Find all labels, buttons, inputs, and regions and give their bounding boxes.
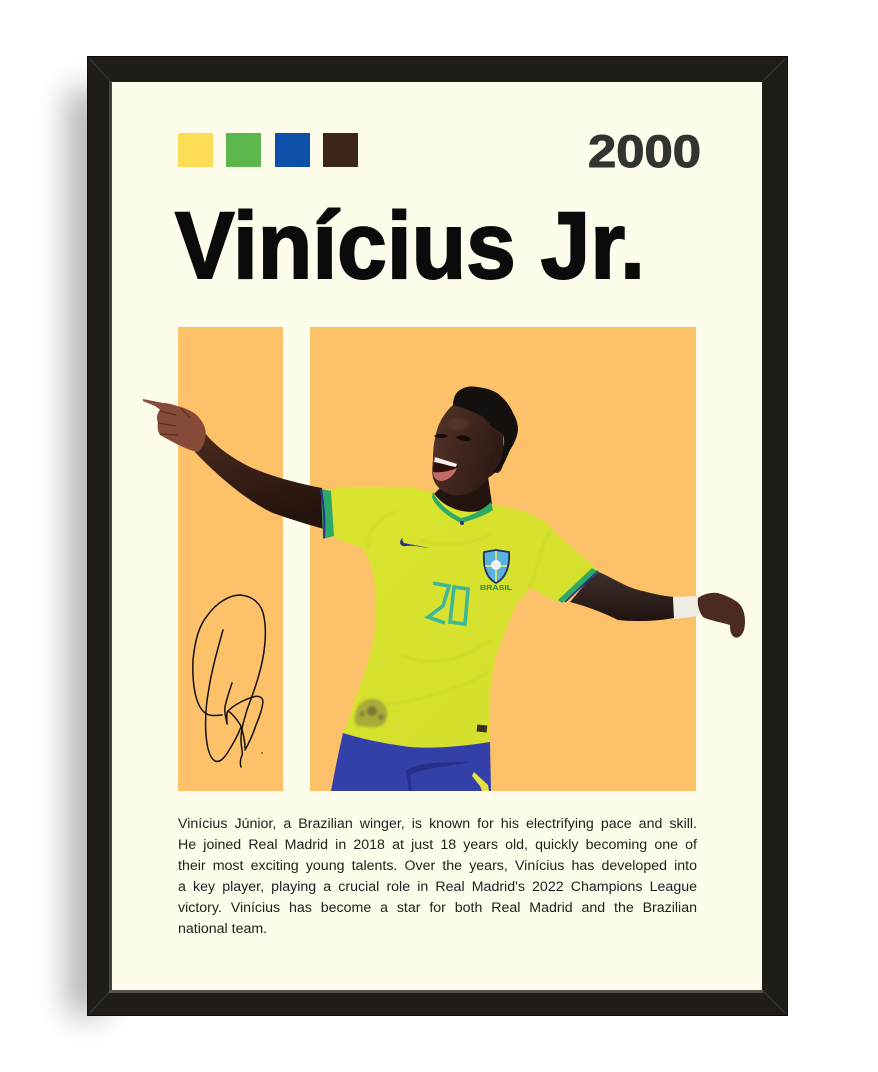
jersey shadow folds [368, 512, 550, 705]
biography paragraph: victory. Vinícius has become a star for both Real Madrid and the Brazilian [178, 900, 697, 916]
biography paragraph: their most exciting young talents. Over the years, Vinícius has developed into [178, 858, 697, 874]
hair [453, 386, 518, 473]
left sleeve cuff piping [321, 489, 324, 538]
jersey tag [477, 724, 487, 733]
swoosh logo [400, 537, 429, 548]
paper background [112, 82, 762, 990]
eyes [434, 434, 472, 441]
left arm [195, 433, 324, 529]
tongue [433, 468, 457, 481]
teeth [434, 457, 457, 467]
crest [480, 550, 513, 592]
neck [434, 470, 492, 521]
colour palette swatches [178, 133, 358, 167]
orange panel: left [178, 327, 283, 791]
left sleeve cuff [321, 489, 334, 539]
collar button [460, 521, 464, 525]
collar [432, 492, 493, 523]
birth year: 2000 [588, 126, 701, 177]
player photo illustration [143, 386, 745, 791]
jersey [330, 487, 597, 748]
shorts stripe [472, 772, 489, 791]
biography paragraph: national team. [178, 921, 267, 937]
right sleeve cuff [558, 568, 599, 603]
left hand fingers [158, 408, 190, 435]
poster frame shadow [68, 90, 104, 1015]
shorts shading [406, 762, 470, 791]
right hand [698, 593, 745, 638]
right arm [570, 571, 674, 621]
shorts [331, 733, 491, 791]
left hand [143, 399, 206, 452]
jersey dirt stain [354, 699, 387, 727]
wristband [673, 596, 699, 619]
poster frame [87, 56, 788, 1016]
biography paragraph: He joined Real Madrid in 2018 at just 18 years old, quickly becoming one of [178, 837, 697, 853]
crest: BRASIL [480, 585, 513, 592]
forehead highlight [447, 418, 469, 430]
biography paragraph: a key player, playing a crucial role in Real Madrid's 2022 Champions League [178, 879, 697, 895]
ear [491, 451, 503, 473]
shirt number [428, 583, 468, 624]
biography paragraph [178, 816, 697, 937]
right sleeve cuff piping [565, 571, 598, 602]
title: Vinícius Jr. [175, 193, 645, 299]
face [432, 405, 504, 495]
orange panel: right [310, 327, 696, 791]
signature [193, 595, 265, 767]
mouth [433, 459, 457, 475]
biography paragraph: Vinícius Júnior, a Brazilian winger, is known for his electrifying pace and skill. [178, 816, 697, 832]
